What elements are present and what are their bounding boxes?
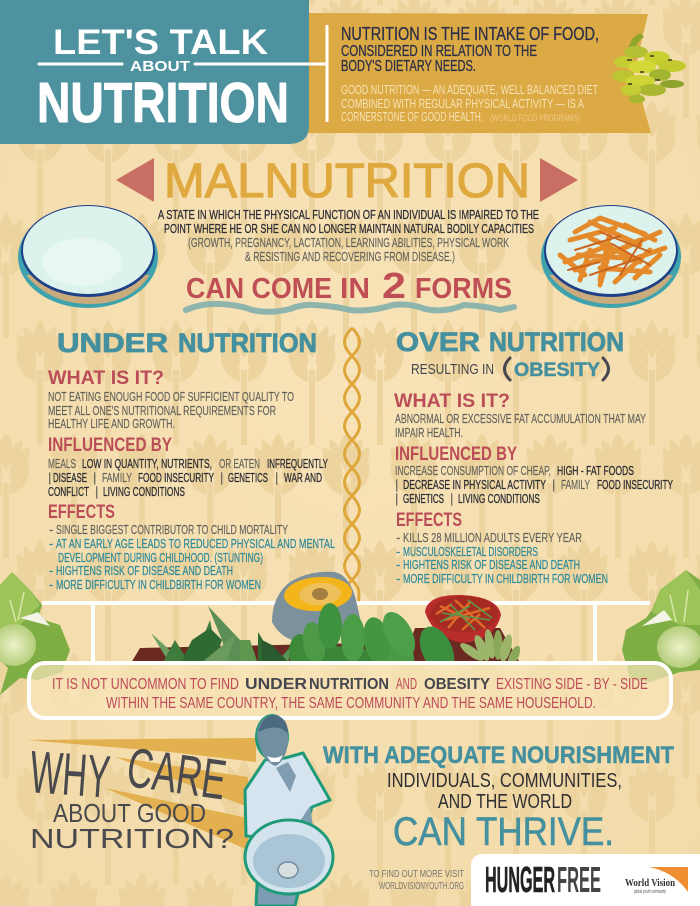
message: with adequate nourishment: CAN THRIVE. bbox=[393, 810, 614, 854]
callout: side by side: EXISTING SIDE - BY - SIDE bbox=[496, 676, 648, 693]
lead statement bbox=[341, 24, 599, 75]
heading: can come in 2 forms: 2 bbox=[382, 265, 406, 306]
influenced by: | bbox=[93, 470, 96, 485]
influenced by: FOOD INSECURITY bbox=[138, 470, 214, 485]
subheading: resulting in obesity: OBESITY bbox=[514, 360, 600, 381]
pumpkin bbox=[272, 572, 360, 644]
influenced by: | bbox=[552, 477, 555, 492]
influenced by: OR EATEN bbox=[219, 456, 260, 471]
heading: can come in 2 forms: CAN COME bbox=[186, 273, 332, 305]
basket bbox=[245, 820, 333, 894]
influenced by: FAMILY bbox=[561, 477, 590, 492]
arrow: left triangle bbox=[116, 158, 154, 202]
influenced by: | bbox=[48, 470, 51, 485]
okra bbox=[151, 606, 292, 664]
what is it: WHAT IS IT? bbox=[48, 368, 164, 389]
heading: can come in 2 forms: IN bbox=[340, 273, 370, 305]
heading: malnutrition: MALNUTRITION bbox=[164, 155, 530, 208]
callout: side by side: AND bbox=[396, 676, 417, 693]
influenced by: MEALS bbox=[48, 456, 76, 471]
vegetables on table bbox=[132, 572, 520, 661]
effects: EFFECTS bbox=[48, 502, 115, 523]
message: with adequate nourishment: WITH ADEQUATE NOURISHMENT bbox=[323, 742, 674, 769]
icon: right cabbage bbox=[622, 570, 700, 682]
title: about: ABOUT bbox=[130, 58, 190, 75]
title panel bbox=[0, 0, 327, 144]
effects: - bbox=[49, 522, 53, 537]
icon: child holding basket bbox=[245, 714, 333, 906]
effects: MUSCULOSKELETAL DISORDERS bbox=[403, 544, 538, 559]
green bananas bbox=[460, 629, 520, 661]
supporting statement bbox=[341, 83, 598, 124]
red bowl of chillies bbox=[425, 595, 501, 643]
icon: bananas bbox=[612, 33, 686, 104]
heading: why care: WHY bbox=[28, 738, 112, 811]
influenced by bbox=[395, 444, 673, 506]
definition of malnutrition: POINT WHERE HE OR SHE CAN NO LONGER MAINTAIN NATURAL BODILY CAPACITIES bbox=[164, 221, 534, 236]
influenced by: INFLUENCED BY bbox=[48, 435, 172, 456]
supporting statement: GOOD NUTRITION — AN ADEQUATE, WELL BALANCED DIET bbox=[341, 83, 598, 97]
effects: - bbox=[396, 544, 400, 559]
about good: ABOUT GOOD bbox=[53, 798, 206, 828]
effects bbox=[48, 502, 335, 592]
heading: why care bbox=[28, 735, 234, 854]
effects: - bbox=[49, 536, 53, 551]
message: with adequate nourishment: AND THE WORLD bbox=[438, 791, 572, 813]
subheading: resulting in obesity: RESULTING IN bbox=[411, 361, 494, 378]
effects: - bbox=[396, 530, 400, 545]
effects: - bbox=[396, 571, 400, 586]
effects: - bbox=[49, 577, 53, 592]
heading: under nutrition: UNDER bbox=[57, 328, 168, 358]
callout: side by side: UNDER bbox=[245, 676, 307, 693]
braid divider bbox=[344, 328, 360, 602]
influenced by: DECREASE IN PHYSICAL ACTIVITY bbox=[403, 477, 546, 492]
message: with adequate nourishment bbox=[323, 742, 674, 854]
legs bbox=[256, 885, 300, 906]
what is it bbox=[394, 391, 646, 440]
heading: under nutrition: NUTRITION bbox=[178, 328, 317, 358]
heading: over nutrition bbox=[396, 327, 624, 357]
what is it bbox=[48, 368, 294, 431]
heading: why care: CARE bbox=[123, 735, 230, 811]
influenced by: | bbox=[450, 491, 453, 506]
effects: HIGHTENS RISK OF DISEASE AND DEATH bbox=[403, 557, 580, 572]
effects: DEVELOPMENT DURING CHILDHOOD. (STUNTING) bbox=[58, 550, 263, 565]
white frame lines bbox=[42, 603, 650, 664]
supporting statement: CORNERSTONE OF GOOD HEALTH. bbox=[341, 110, 483, 124]
visit link: WORLDVISIONYOUTH.ORG bbox=[379, 880, 464, 892]
what is it: WHAT IS IT? bbox=[394, 391, 510, 412]
cucumbers bbox=[289, 603, 454, 661]
effects: MORE DIFFICULTY IN CHILDBIRTH FOR WOMEN bbox=[56, 577, 261, 592]
callout: side by side: NUTRITION bbox=[309, 676, 389, 693]
table bbox=[131, 628, 520, 663]
logo: world vision bbox=[625, 867, 688, 895]
influenced by: WAR AND bbox=[284, 470, 322, 485]
effects bbox=[396, 510, 608, 586]
heading: can come in 2 forms: FORMS bbox=[415, 273, 512, 305]
what is it: HEALTHY LIFE AND GROWTH. bbox=[48, 416, 175, 431]
influenced by: | bbox=[275, 470, 278, 485]
icon: bowl of fries bbox=[541, 205, 681, 308]
heading: under nutrition bbox=[57, 328, 317, 358]
influenced by: GENETICS bbox=[403, 491, 444, 506]
shirt bbox=[245, 753, 330, 838]
effects: - bbox=[49, 563, 53, 578]
influenced by: | bbox=[220, 470, 223, 485]
effects: HIGHTENS RISK OF DISEASE AND DEATH bbox=[56, 563, 233, 578]
effects: EFFECTS bbox=[396, 510, 462, 531]
effects: KILLS 28 MILLION ADULTS EVERY YEAR bbox=[403, 530, 582, 545]
influenced by: INFLUENCED BY bbox=[395, 444, 517, 465]
visit link: TO FIND OUT MORE VISIT bbox=[369, 868, 464, 880]
icon: empty bowl bbox=[18, 205, 158, 308]
definition of malnutrition: A STATE IN WHICH THE PHYSICAL FUNCTION OF AN INDIVIDUAL IS IMPAIRED TO THE bbox=[158, 207, 539, 222]
heading: over nutrition: NUTRITION bbox=[489, 327, 624, 357]
gold rays bbox=[27, 738, 256, 850]
influenced by: HIGH - FAT FOODS bbox=[557, 463, 634, 478]
gold ribbon panel: definition of nutrition bbox=[305, 13, 686, 133]
influenced by: CONFLICT bbox=[48, 484, 89, 499]
arrow: right triangle bbox=[540, 158, 578, 202]
callout: side by side bbox=[29, 663, 671, 718]
effects: AT AN EARLY AGE LEADS TO REDUCED PHYSICAL AND MENTAL bbox=[56, 536, 335, 551]
influenced by: INCREASE CONSUMPTION OF CHEAP, bbox=[395, 463, 551, 478]
heading: over nutrition: OVER bbox=[396, 327, 480, 357]
title rule left bbox=[39, 62, 122, 66]
supporting statement: COMBINED WITH REGULAR PHYSICAL ACTIVITY — IS A bbox=[341, 97, 584, 111]
lead statement: NUTRITION IS THE INTAKE OF FOOD, bbox=[341, 24, 599, 44]
logo: hunger free: HUNGER bbox=[485, 859, 555, 900]
influenced by: GENETICS bbox=[228, 470, 268, 485]
definition of malnutrition bbox=[158, 207, 539, 264]
lead statement: CONSIDERED IN RELATION TO THE bbox=[341, 43, 537, 60]
icon: left cabbage bbox=[0, 572, 70, 695]
visit link bbox=[369, 868, 464, 892]
what is it: MEET ALL ONE'S NUTRITIONAL REQUIREMENTS FOR bbox=[48, 403, 276, 418]
influenced by: LIVING CONDITIONS bbox=[458, 491, 540, 506]
head bbox=[255, 714, 289, 760]
vertical white rule bbox=[326, 25, 328, 122]
nutrition question: NUTRITION? bbox=[30, 823, 234, 854]
influenced by: | bbox=[395, 477, 398, 492]
influenced by: INFREQUENTLY bbox=[267, 456, 328, 471]
lead statement: BODY'S DIETARY NEEDS. bbox=[341, 58, 476, 75]
callout: side by side: OBESITY bbox=[424, 676, 490, 693]
title: let's talk: LET'S TALK bbox=[53, 23, 268, 62]
supporting statement: (WORLD FOOD PROGRAMS) bbox=[490, 113, 580, 123]
wavy underline bbox=[186, 304, 514, 312]
effects: - bbox=[396, 557, 400, 572]
effects: SINGLE BIGGEST CONTRIBUTOR TO CHILD MORTALITY bbox=[56, 522, 288, 537]
panel: under nutrition bbox=[48, 328, 335, 592]
callout: side by side: IT IS NOT UNCOMMON TO FIND bbox=[52, 676, 239, 693]
message: with adequate nourishment: INDIVIDUALS, COMMUNITIES, bbox=[387, 770, 622, 792]
panel: over nutrition bbox=[394, 327, 673, 586]
influenced by: | bbox=[395, 491, 398, 506]
heading: can come in 2 forms bbox=[186, 265, 512, 306]
logo panel: FREE bbox=[557, 859, 601, 900]
influenced by: | bbox=[95, 484, 98, 499]
title: nutrition: NUTRITION bbox=[37, 71, 289, 135]
logo: world vision: World Vision bbox=[625, 878, 675, 889]
influenced by: LIVING CONDITIONS bbox=[103, 484, 185, 499]
effects: MORE DIFFICULTY IN CHILDBIRTH FOR WOMEN bbox=[403, 571, 608, 586]
title rule right bbox=[195, 62, 327, 66]
what is it: NOT EATING ENOUGH FOOD OF SUFFICIENT QUALITY TO bbox=[48, 389, 294, 404]
what is it: IMPAIR HEALTH. bbox=[395, 425, 463, 440]
influenced by: LOW IN QUANTITY, NUTRIENTS, bbox=[82, 456, 212, 471]
logo: world vision: global youth community bbox=[634, 889, 666, 895]
logo panel bbox=[471, 854, 700, 906]
subheading: resulting in obesity bbox=[411, 358, 608, 381]
influenced by: FAMILY bbox=[102, 470, 132, 485]
definition of malnutrition: (GROWTH, PREGNANCY, LACTATION, LEARNING ABILITIES, PHYSICAL WORK bbox=[188, 235, 509, 250]
influenced by bbox=[48, 435, 328, 499]
influenced by: DISEASE bbox=[53, 470, 87, 485]
definition of malnutrition: & RESISTING AND RECOVERING FROM DISEASE.) bbox=[245, 249, 455, 264]
